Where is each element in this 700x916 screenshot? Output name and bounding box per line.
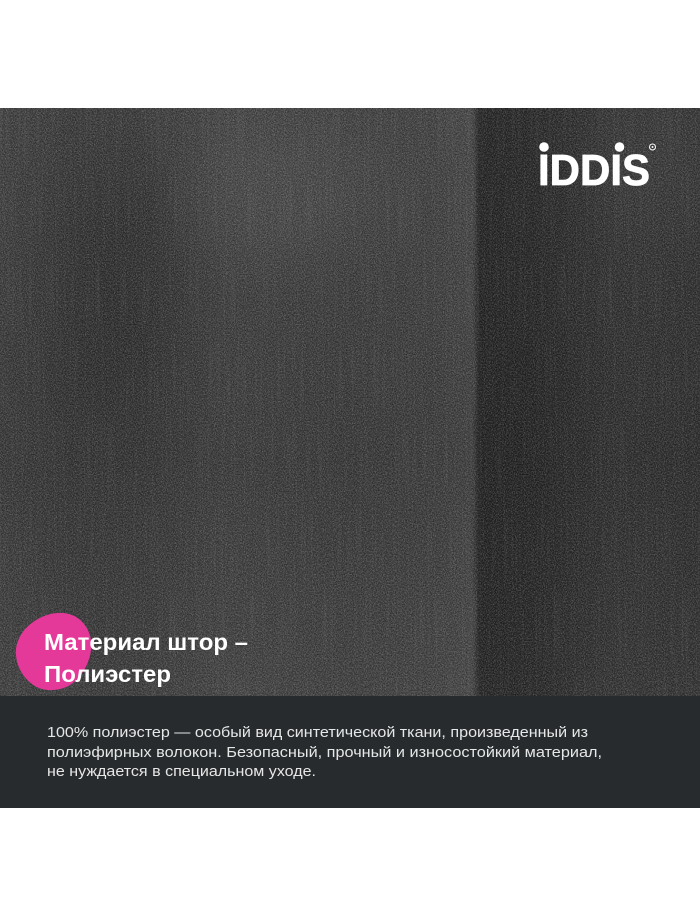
heading: material: Материал штор – [44,629,248,655]
text: description: не нуждается в специальном уходе. [47,763,316,780]
text: description [47,724,602,780]
panel: description band [0,696,700,808]
accent: pink blob [16,613,91,690]
text: description: 100% полиэстер — особый вид синтетической ткани, произведенный из [47,724,588,741]
heading: material [44,629,248,687]
text: description: полиэфирных волокон. Безопасный, прочный и износостойкий материал, [47,744,602,761]
photo: dark grey fabric curtain [0,100,700,696]
logo: IDDIS: IDDIS [538,146,650,195]
heading: material: Полиэстер [44,661,171,687]
